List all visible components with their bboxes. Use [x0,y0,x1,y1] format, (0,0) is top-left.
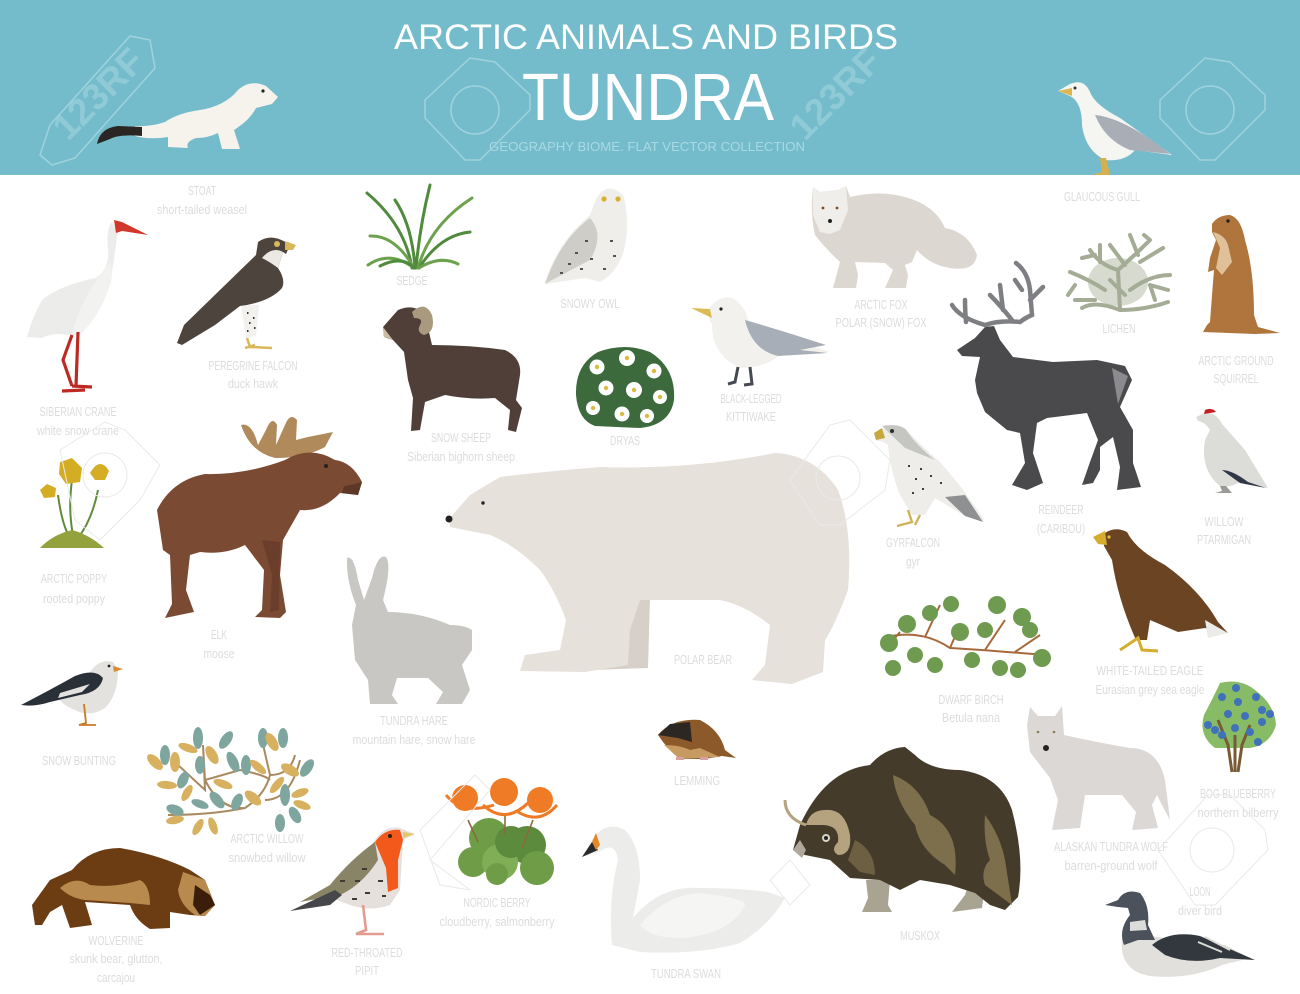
label: wolverine [70,933,162,985]
icon: wolverine [32,848,215,929]
label: kittiwake: KITTIWAKE [726,409,776,424]
label: willow ptarmigan: PTARMIGAN [1197,532,1251,547]
icon: siberian crane [27,220,148,391]
label: stoat: STOAT [188,183,216,198]
label: stoat: short-tailed weasel [157,202,247,217]
icon: alaskan tundra wolf [1027,706,1170,830]
icon: arctic willow [144,727,317,837]
label: alaskan tundra wolf: barren-ground wolf [1064,858,1158,873]
label: polar bear: POLAR BEAR [674,652,732,667]
label: elk: ELK [211,627,227,642]
label: red-throated pipit: PIPIT [355,963,379,978]
label: nordic berry: NORDIC BERRY [464,895,531,910]
label: reindeer: (CARIBOU) [1037,521,1085,536]
label: peregrine falcon: duck hawk [228,376,278,391]
label: sedge: SEDGE [396,273,428,288]
watermarks in header: 123RF [782,40,889,148]
icon: arctic ground squirrel [1203,215,1280,334]
icon: stoat [97,83,278,149]
label: red-throated pipit [332,945,402,978]
label: snowy owl: SNOWY OWL [560,296,620,311]
watermarks over body [60,420,1268,905]
icon: dryas [576,347,674,428]
label: loon: LOON [1190,884,1210,899]
title: tundra: TUNDRA [522,60,774,135]
icon: willow ptarmigan [1196,409,1268,493]
icon: nordic berry [446,778,557,885]
label: snow bunting: SNOW BUNTING [42,753,116,768]
label: peregrine falcon: PEREGRINE FALCON [208,358,298,373]
icon: white-tailed eagle [1093,529,1228,651]
icon: glaucous gull [1058,82,1172,175]
label: dwarf birch: Betula nana [942,710,1001,725]
label: stoat [157,183,247,217]
subtitle: GEOGRAPHY BIOME. FLAT VECTOR COLLECTION [489,139,805,154]
label: dryas: DRYAS [610,433,640,448]
label: bog blueberry [1198,786,1279,820]
label: dwarf birch [938,692,1004,725]
icon: tundra hare [347,556,472,704]
label: snow sheep: SNOW SHEEP [431,430,491,445]
label: loon [1178,884,1222,918]
icon: arctic fox [812,186,977,288]
icon: arctic poppy [40,458,109,548]
label: white-tailed eagle: WHITE-TAILED EAGLE [1096,663,1204,678]
label: arctic poppy [41,571,107,606]
icon: lemming [658,720,736,760]
icon: muskox [785,747,1020,912]
header band [0,0,1300,175]
label: wolverine: WOLVERINE [88,933,144,948]
label: gyrfalcon: GYRFALCON [886,535,940,550]
label: arctic poppy: ARCTIC POPPY [41,571,107,586]
label: willow ptarmigan [1197,514,1251,547]
icon: red-throated pipit [290,828,415,934]
icon: peregrine falcon [177,238,296,348]
label: kittiwake [720,391,782,424]
label: siberian crane: white snow crane [36,423,119,438]
title: arctic animals and birds: ARCTIC ANIMALS AND BIRDS [394,18,898,57]
label: arctic fox: POLAR (SNOW) FOX [836,315,927,330]
label: loon: diver bird [1178,903,1222,918]
label: reindeer: REINDEER [1038,502,1084,517]
label: arctic fox [836,297,927,330]
icon: snow bunting [21,661,123,725]
label: arctic willow [228,831,306,865]
label: tundra hare: mountain hare, snow hare [352,732,476,747]
label: nordic berry [440,895,555,929]
icon: bog blueberry [1202,682,1276,772]
label: lemming: LEMMING [674,773,720,788]
icon: polar bear [446,453,849,684]
label: siberian crane: SIBERIAN CRANE [40,404,117,419]
label: muskox: MUSKOX [900,928,940,943]
label: elk [204,627,234,661]
icon: lichen [1068,235,1170,310]
label: arctic ground squirrel: SQUIRREL [1214,371,1258,386]
label: tundra swan: TUNDRA SWAN [651,966,721,981]
label: white-tailed eagle [1096,663,1204,697]
label: dwarf birch: DWARF BIRCH [938,692,1004,707]
label: alaskan tundra wolf: ALASKAN TUNDRA WOLF [1054,839,1168,854]
icon: snowy owl [545,188,627,284]
label: tundra hare [352,713,476,747]
label: arctic willow: snowbed willow [228,850,306,865]
icon: sedge [367,185,472,268]
label: arctic poppy: rooted poppy [43,591,105,606]
label: arctic fox: ARCTIC FOX [854,297,908,312]
label: snow sheep [407,430,515,464]
label: bog blueberry: northern bilberry [1198,805,1279,820]
label: nordic berry: cloudberry, salmonberry [440,914,555,929]
icon: moose [157,417,362,618]
label: glaucous gull: GLAUCOUS GULL [1064,189,1140,204]
icon: black-legged kittiwake [691,298,830,385]
label: willow ptarmigan: WILLOW [1204,514,1244,529]
label: tundra hare: TUNDRA HARE [380,713,448,728]
label: gyrfalcon [886,535,940,569]
label: wolverine: skunk bear, glutton, [70,951,162,966]
icon: tundra swan [582,827,785,953]
icon: dwarf birch [880,596,1051,678]
icon: snow sheep [383,307,522,432]
watermarks in header [40,36,1265,165]
label: siberian crane [36,404,119,438]
label: wolverine: carcajou [97,970,135,985]
label: lichen: LICHEN [1102,321,1136,336]
label: elk: moose [204,646,234,661]
label: reindeer [1037,502,1085,536]
label: alaskan tundra wolf [1054,839,1168,873]
icon: gyrfalcon [874,425,985,526]
label: red-throated pipit: RED-THROATED [332,945,402,960]
label: gyrfalcon: gyr [906,554,921,569]
icon: reindeer [952,263,1141,490]
label: kittiwake: BLACK-LEGGED [720,391,782,406]
label: arctic ground squirrel [1198,353,1274,386]
watermarks in header: 123RF [45,40,152,148]
label: arctic willow: ARCTIC WILLOW [230,831,304,846]
label: white-tailed eagle: Eurasian grey sea eagle [1096,682,1204,697]
label: snow sheep: Siberian bighorn sheep [407,449,515,464]
icon: loon [1105,892,1255,977]
label: peregrine falcon [208,358,298,391]
